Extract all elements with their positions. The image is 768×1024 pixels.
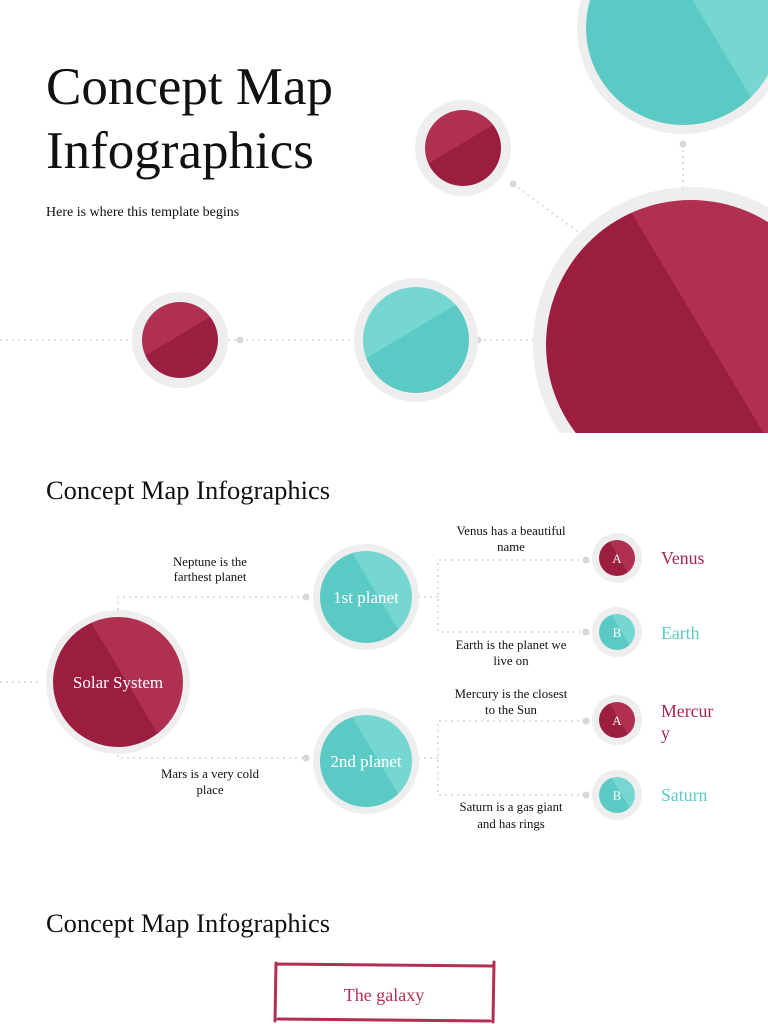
- circle: teal middle: [354, 278, 478, 402]
- box: The galaxy: The galaxy: [344, 985, 424, 1005]
- text: Mercury desc: to the Sun: [485, 703, 538, 717]
- text: Mercury desc: [455, 687, 568, 717]
- node: 1st planet: [313, 544, 419, 650]
- circle: small crimson left: [132, 292, 228, 388]
- section 2 heading: Concept Map Infographics: [46, 475, 330, 505]
- subtitle: Here is where this template begins: [46, 205, 239, 220]
- leaf: A Venus: [592, 533, 705, 583]
- leaf: B Saturn: [592, 770, 708, 820]
- box: The galaxy: [275, 962, 494, 1022]
- leaf: B Earth: [592, 607, 700, 657]
- text: Neptune: Neptune is the: [173, 555, 247, 569]
- text: Mars: [161, 767, 260, 797]
- title: [46, 58, 333, 180]
- concept map connectors: [0, 560, 585, 795]
- leaf: A Mercury: y: [661, 723, 670, 743]
- text: Earth desc: Earth is the planet we: [456, 638, 567, 652]
- text: Mars: Mars is a very cold: [161, 767, 260, 781]
- text: Saturn desc: [459, 800, 563, 831]
- leaf: A Mercury: Mercur: [661, 701, 713, 721]
- connector dots: [236, 140, 686, 344]
- circle: small crimson top: [415, 100, 511, 196]
- node: 2nd planet: 2nd planet: [330, 752, 402, 771]
- text: Saturn desc: and has rings: [477, 817, 545, 831]
- node: 2nd planet: [313, 708, 419, 814]
- section 3 heading: Concept Map Infographics: [46, 908, 330, 938]
- node: Solar System: Solar System: [73, 673, 163, 692]
- leaf: A Venus: Venus: [661, 548, 705, 568]
- circle: big teal top: [577, 0, 768, 134]
- text: Mercury desc: Mercury is the closest: [455, 687, 568, 701]
- node: Solar System: [46, 610, 190, 754]
- leaf: B Saturn: B: [613, 788, 622, 803]
- leaf: A Mercury: [592, 695, 713, 745]
- leaf: A Venus: A: [612, 551, 622, 566]
- title: Concept Map: [46, 58, 333, 116]
- text: Neptune: farthest planet: [174, 570, 247, 584]
- leaf: B Saturn: Saturn: [661, 785, 708, 805]
- text: Earth desc: [456, 638, 567, 668]
- header connector lines: [0, 144, 683, 340]
- text: Venus desc: Venus has a beautiful: [456, 524, 566, 538]
- leaf: A Mercury: A: [612, 713, 622, 728]
- text: Venus desc: [456, 524, 566, 554]
- text: Saturn desc: Saturn is a gas giant: [459, 800, 563, 814]
- leaf: B Earth: Earth: [661, 623, 700, 643]
- leaf: B Earth: B: [613, 625, 622, 640]
- text: Mars: place: [196, 783, 224, 797]
- text: Earth desc: live on: [493, 654, 529, 668]
- text: Neptune: [173, 555, 247, 584]
- text: Venus desc: name: [497, 540, 525, 554]
- node: 1st planet: 1st planet: [333, 588, 399, 607]
- circle: big crimson: [533, 187, 768, 503]
- white cut below header: [0, 433, 768, 553]
- title: Infographics: [46, 122, 314, 180]
